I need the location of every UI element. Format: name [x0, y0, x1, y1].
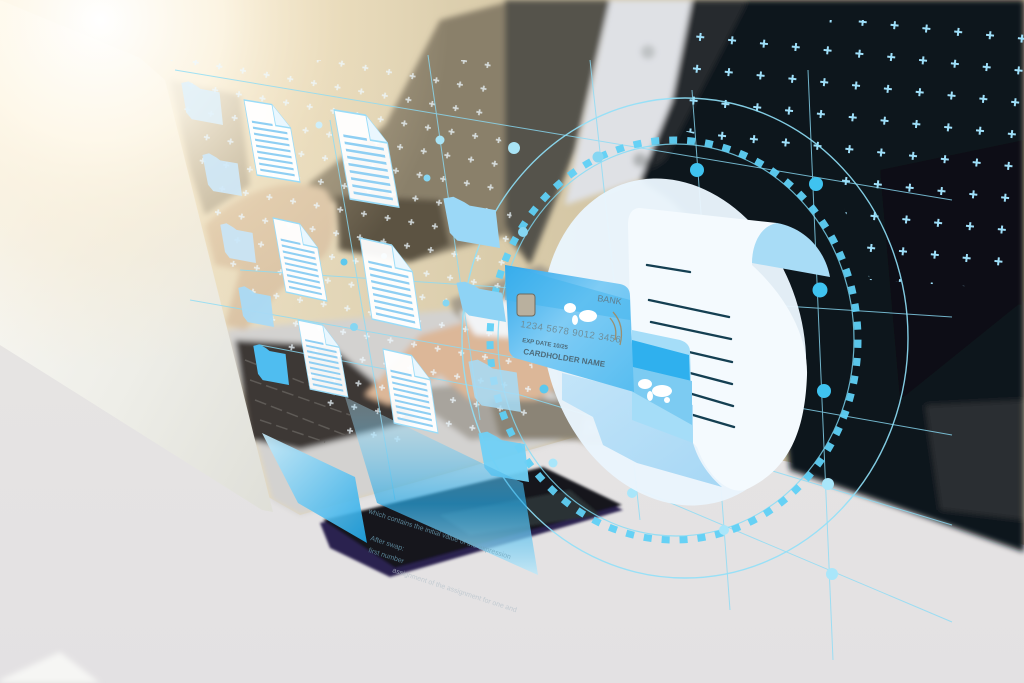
dark forearm [335, 195, 450, 262]
keyboard [235, 340, 420, 450]
network nodes [316, 122, 838, 580]
receipt paper [628, 208, 807, 491]
folder 6 [443, 195, 500, 248]
receipt fold shadow [562, 373, 722, 487]
table surface [0, 345, 1024, 683]
folder 4 [238, 285, 274, 327]
card number: 1234 5678 9012 3456 [520, 319, 622, 346]
phone [320, 467, 623, 577]
phone reflection text: After swap: [369, 535, 405, 553]
phone reflection text [366, 508, 518, 614]
hand left [205, 184, 334, 330]
hand right [365, 315, 560, 410]
inner thin ring [498, 144, 854, 536]
back credit card [632, 330, 693, 443]
folder 5 [253, 343, 289, 385]
receipt text lines [647, 265, 734, 427]
folder 2 [202, 152, 242, 196]
receipt blob background [504, 147, 844, 537]
document 6 [383, 349, 438, 433]
shirt buttons [641, 45, 655, 59]
folders [181, 80, 529, 482]
shirt [565, 0, 692, 205]
folder 9 [478, 430, 529, 482]
folder 3 [220, 222, 256, 263]
document 3 [273, 218, 327, 301]
keyboard keys [245, 360, 350, 442]
expiry: EXP DATE 10/25 [522, 338, 569, 351]
receipt [562, 208, 830, 491]
laptop base [225, 310, 600, 515]
area behind receipt [450, 265, 650, 445]
receipt curl [752, 223, 830, 277]
sunlight glow [0, 0, 620, 440]
large translucent sheet right [345, 397, 538, 575]
bank label: BANK [597, 293, 622, 307]
left sleeve [300, 0, 610, 265]
shirt cuff [460, 298, 512, 338]
folder 7 [456, 280, 506, 322]
world map back card [638, 379, 672, 403]
document 5 [298, 320, 348, 397]
card map [564, 303, 597, 325]
card chip [517, 294, 535, 316]
plus grid pattern [680, 20, 1024, 290]
phone reflection text: assignment of the assignment for one and [391, 567, 518, 614]
dashed ring [490, 140, 858, 540]
document icons [244, 100, 438, 433]
phone reflection text: first number [367, 547, 405, 566]
folder 8 [468, 358, 521, 412]
dark jacket [640, 0, 1024, 552]
phone reflection text: which contains the initial value of the expression [366, 508, 512, 561]
document 4 [360, 238, 421, 330]
large translucent sheet left [262, 433, 367, 543]
network grid lines [175, 55, 952, 660]
dot grid pattern [165, 60, 540, 450]
lapel [505, 0, 610, 265]
document 2 [334, 110, 399, 207]
document 1 [244, 100, 300, 182]
laptop lid [0, 0, 273, 512]
contactless symbol [610, 312, 621, 345]
cardholder name: CARDHOLDER NAME [523, 347, 606, 369]
front credit card [505, 265, 634, 392]
outer thin ring [462, 98, 908, 578]
folder 1 [181, 80, 223, 125]
